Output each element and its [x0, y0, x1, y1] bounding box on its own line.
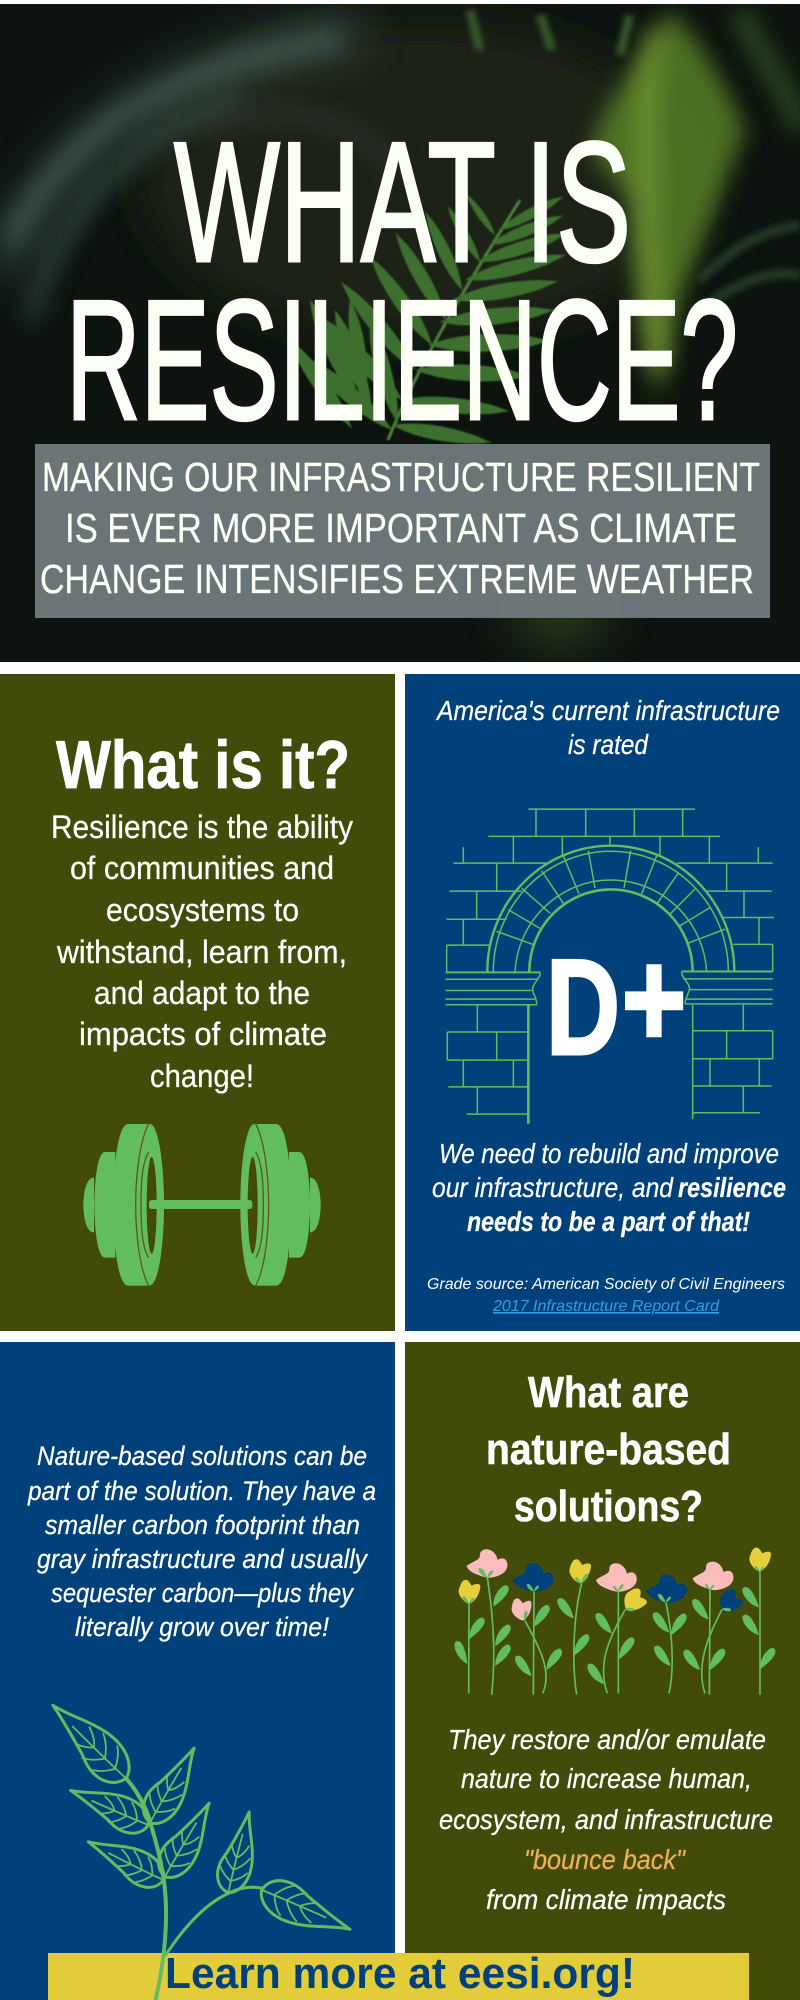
- text: restore and emulate nature: nature to increase human,: [461, 1763, 752, 1794]
- text: nature-based intro: sequester carbon—plus they: [51, 1578, 354, 1608]
- illustration: flowers: [452, 1548, 778, 1695]
- text: resilience definition: ecosystems to: [106, 892, 299, 928]
- text: restore and emulate nature: "bounce back": [524, 1844, 686, 1875]
- panel: nature-based solutions intro: [0, 1342, 395, 2000]
- banner: learn more: [48, 1949, 749, 2000]
- text: rebuild and improve: [432, 1138, 786, 1237]
- banner: learn more: Learn more at eesi.org!: [165, 1949, 635, 1998]
- subtitle box: [35, 444, 770, 618]
- text: nature-based intro: part of the solution. They have a: [27, 1476, 376, 1506]
- text: rebuild and improve: needs to be a part of that!: [467, 1206, 750, 1237]
- text: resilience definition: withstand, learn from,: [56, 934, 347, 970]
- heading: what are nature-based solutions: solutions?: [514, 1482, 703, 1531]
- fern frond: [284, 192, 569, 450]
- text: resilience definition: and adapt to the: [94, 975, 310, 1011]
- heading: what is it: What is it?: [56, 727, 350, 803]
- text: nature-based intro: gray infrastructure and usually: [37, 1544, 368, 1574]
- text: grade source: 2017 Infrastructure Report Card: [492, 1298, 720, 1315]
- text: resilience definition: change!: [150, 1058, 254, 1094]
- text: infrastructure is rated: is rated: [568, 729, 649, 760]
- heading: what are nature-based solutions: What are: [528, 1368, 689, 1417]
- text: nature-based intro: literally grow over time!: [75, 1612, 329, 1642]
- heading: what are nature-based solutions: nature-based: [486, 1425, 731, 1474]
- text: restore and emulate nature: from climate impacts: [486, 1884, 726, 1915]
- text: rebuild and improve: our infrastructure, and: [432, 1172, 674, 1203]
- icon: dumbbell: [83, 1124, 321, 1286]
- panel: what are nature-based solutions: [405, 1342, 800, 2000]
- illustration: leafy plant: [39, 1691, 357, 1999]
- heading: what are nature-based solutions: [486, 1368, 731, 1531]
- text: restore and emulate nature: They restore and/or emulate: [448, 1724, 766, 1755]
- panel: what is it: [0, 674, 395, 1331]
- text: infrastructure is rated: [435, 695, 780, 760]
- text: nature-based intro: Nature-based solutions can be: [37, 1441, 367, 1471]
- text: resilience definition: of communities and: [70, 850, 334, 886]
- title: [66, 107, 738, 456]
- illustration: stone arch: [446, 809, 774, 1124]
- grade: D+: [546, 923, 686, 1083]
- grade: D+: +: [622, 923, 686, 1075]
- text: resilience definition: impacts of climate: [79, 1016, 327, 1052]
- grade: D+: D: [546, 931, 620, 1083]
- text: nature-based intro: [27, 1441, 376, 1642]
- text: grade source: [427, 1276, 785, 1315]
- panel: infrastructure grade: [405, 674, 800, 1331]
- text: resilience definition: Resilience is the ability: [51, 809, 353, 845]
- text: grade source: Grade source: American Society of Civil Engineers: [427, 1276, 785, 1293]
- text: nature-based intro: smaller carbon footprint than: [45, 1510, 360, 1540]
- text: restore and emulate nature: [439, 1724, 773, 1915]
- text: restore and emulate nature: ecosystem, and infrastructure: [439, 1804, 773, 1835]
- text: resilience definition: [51, 809, 353, 1094]
- hero panel: fern photo background: [0, 4, 800, 662]
